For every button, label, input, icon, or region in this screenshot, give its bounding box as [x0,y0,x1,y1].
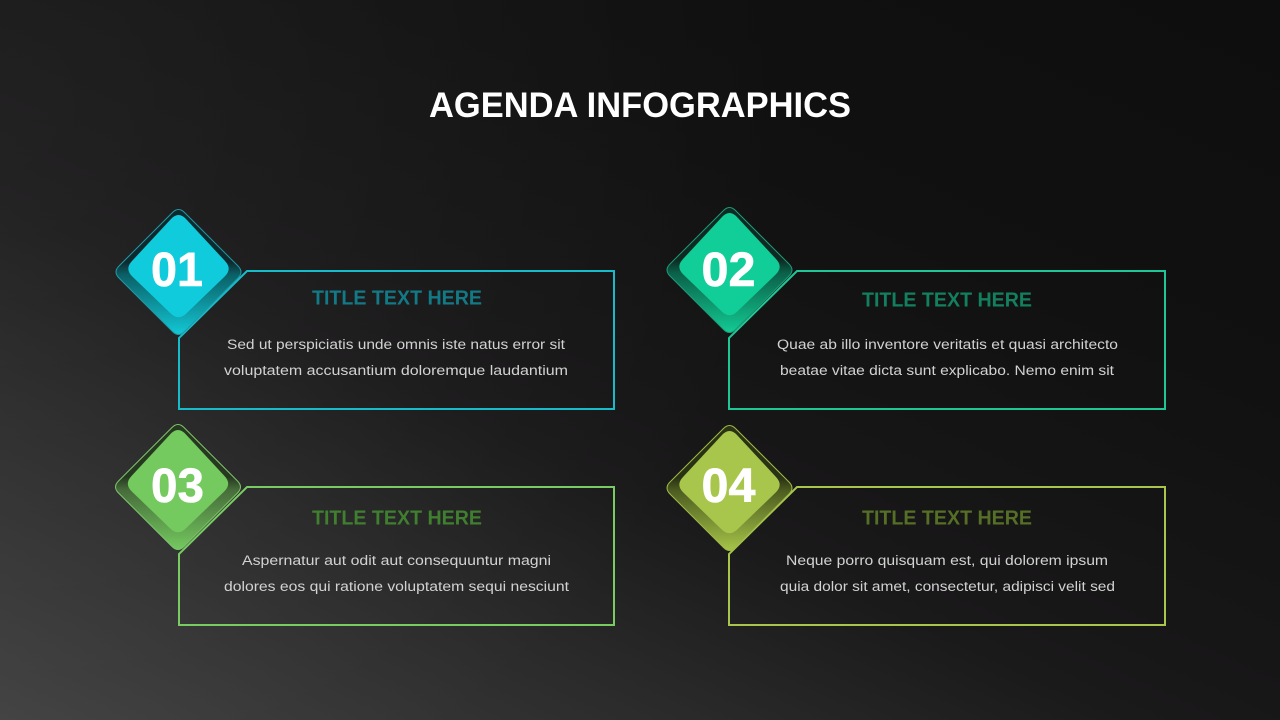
panel: agenda item 02 [667,208,1165,409]
body text 04 [780,553,1115,595]
card outline 03 [179,487,614,625]
body text 02: beatae vitae dicta sunt explicabo. Nemo enim sit [780,363,1114,379]
heading 01: TITLE TEXT HERE [312,288,482,310]
icon: number diamond 04 [667,426,792,550]
icon: number diamond 04: 04 [702,460,756,513]
card outline 01 [179,271,614,409]
body text 02: Quae ab illo inventore veritatis et quasi architecto [777,337,1118,353]
body text 03 [224,553,569,595]
panel: agenda item 03 [116,424,614,625]
body text 03: Aspernatur aut odit aut consequuntur magni [242,553,551,569]
icon: number diamond 01 [116,210,241,334]
icon: number diamond 03: 03 [151,460,204,513]
heading 03: TITLE TEXT HERE [312,508,482,530]
body text 01 [224,337,568,379]
body text 03: dolores eos qui ratione voluptatem sequi nesciunt [224,579,569,595]
body text 01: Sed ut perspiciatis unde omnis iste natus error sit [227,337,565,353]
icon: number diamond 03 [116,424,240,550]
heading 04: TITLE TEXT HERE [862,508,1032,530]
icon: number diamond 01: 01 [151,244,203,297]
title: AGENDA INFOGRAPHICS [429,85,851,125]
icon: number diamond 02: 02 [702,244,756,297]
card outline 02 [729,271,1165,409]
body text 02 [777,337,1118,379]
panel: agenda item 01 [116,210,614,409]
panel: agenda item 04 [667,426,1165,625]
icon: number diamond 02 [667,208,792,332]
body text 04: quia dolor sit amet, consectetur, adipisci velit sed [780,579,1115,595]
heading 02: TITLE TEXT HERE [862,290,1032,312]
card outline 04 [729,487,1165,625]
body text 01: voluptatem accusantium doloremque laudantium [224,363,568,379]
body text 04: Neque porro quisquam est, qui dolorem ipsum [786,553,1108,569]
